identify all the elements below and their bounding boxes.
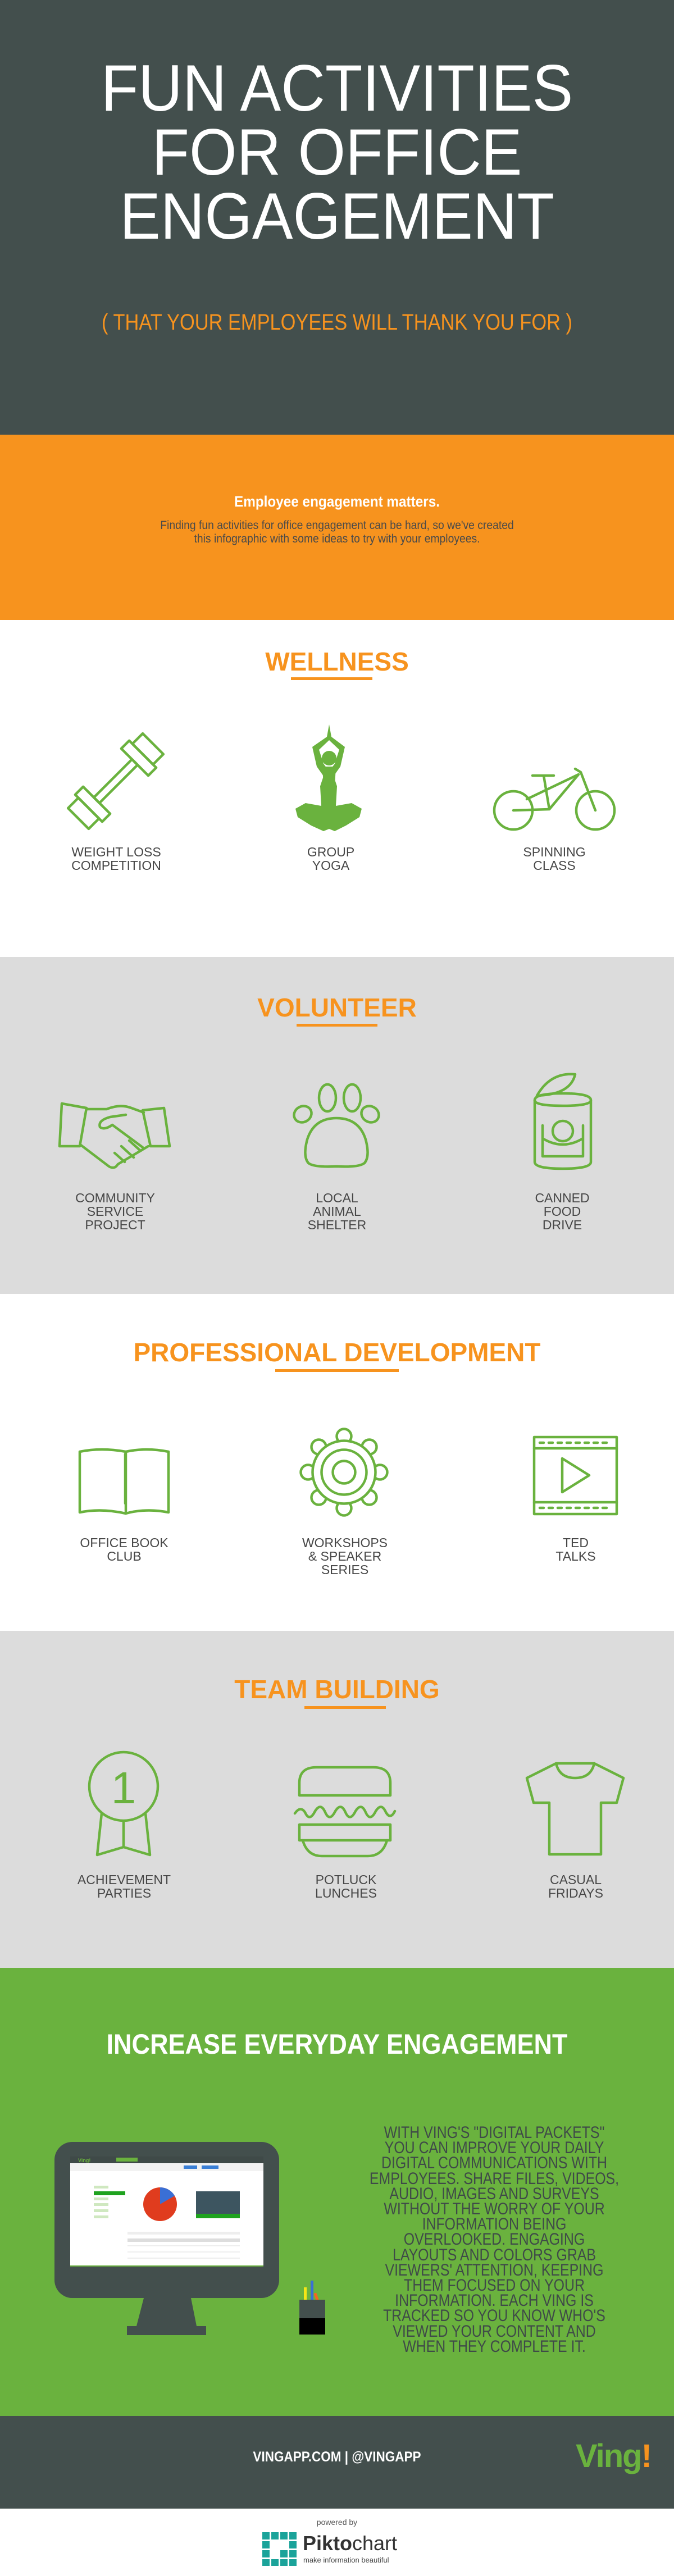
label: CLASS bbox=[533, 858, 576, 873]
label bbox=[315, 1872, 377, 1900]
label bbox=[78, 1872, 171, 1900]
icon: medal: 1 bbox=[111, 1763, 136, 1813]
label: WEIGHT LOSS bbox=[71, 845, 161, 859]
icon: canned food bbox=[534, 1073, 592, 1170]
label: COMMUNITY bbox=[75, 1191, 155, 1205]
label: & SPEAKER bbox=[308, 1549, 381, 1563]
intro heading: Employee engagement matters. bbox=[234, 493, 440, 510]
intro text bbox=[160, 519, 514, 545]
text block: THEM FOCUSED ON YOUR bbox=[404, 2276, 585, 2295]
heading: professional development: PROFESSIONAL DEVELOPMENT bbox=[133, 1338, 541, 1367]
label: SERIES bbox=[321, 1562, 368, 1577]
powered by text: powered by bbox=[317, 2518, 357, 2527]
powered by piktochart bbox=[0, 2509, 674, 2576]
subtitle: ( THAT YOUR EMPLOYEES WILL THANK YOU FOR ) bbox=[102, 310, 572, 335]
panel: increase everyday engagement bbox=[0, 1968, 674, 2416]
footer links: VINGAPP.COM | @VINGAPP bbox=[253, 2449, 421, 2465]
header panel bbox=[0, 0, 674, 435]
icon: bicycle bbox=[493, 767, 616, 831]
label: CANNED bbox=[535, 1191, 590, 1205]
label: TED bbox=[563, 1535, 589, 1550]
label bbox=[302, 1535, 388, 1577]
icon: dumbbell bbox=[66, 732, 165, 830]
text block: TRACKED SO YOU KNOW WHO'S bbox=[383, 2306, 605, 2325]
panel: team building bbox=[0, 1631, 674, 1968]
panel: volunteer bbox=[0, 957, 674, 1294]
text block: AUDIO, IMAGES AND SURVEYS bbox=[389, 2185, 599, 2203]
piktochart logo bbox=[262, 2532, 397, 2566]
heading: wellness: WELLNESS bbox=[265, 647, 409, 676]
label bbox=[71, 845, 161, 873]
heading: volunteer: VOLUNTEER bbox=[257, 993, 417, 1022]
text block bbox=[370, 2123, 619, 2356]
label: SERVICE bbox=[87, 1204, 143, 1219]
title bbox=[101, 51, 573, 253]
heading: INCREASE EVERYDAY ENGAGEMENT bbox=[106, 2028, 567, 2060]
piktochart logo: Piktochart bbox=[303, 2532, 397, 2555]
label: COMPETITION bbox=[71, 858, 161, 873]
label bbox=[548, 1872, 603, 1900]
text block: INFORMATION. EACH VING IS bbox=[395, 2291, 594, 2310]
icon: gear bbox=[299, 1428, 389, 1517]
label bbox=[523, 845, 586, 873]
icon: paw bbox=[293, 1083, 380, 1168]
label: DRIVE bbox=[543, 1218, 582, 1232]
label bbox=[555, 1535, 596, 1563]
text block: VIEWERS' ATTENTION, KEEPING bbox=[385, 2261, 603, 2279]
text block: WITH VING'S "DIGITAL PACKETS" bbox=[384, 2123, 604, 2142]
icon: handshake bbox=[58, 1102, 171, 1169]
piktochart logo: make information beautiful bbox=[303, 2556, 389, 2564]
icon: medal bbox=[88, 1751, 160, 1857]
label: ANIMAL bbox=[313, 1204, 361, 1219]
label: LUNCHES bbox=[315, 1886, 377, 1900]
text block: YOU CAN IMPROVE YOUR DAILY bbox=[385, 2139, 604, 2157]
label: ACHIEVEMENT bbox=[78, 1872, 171, 1887]
panel: professional development bbox=[0, 1294, 674, 1631]
label: YOGA bbox=[312, 858, 349, 873]
text block: OVERLOOKED. ENGAGING bbox=[404, 2230, 585, 2249]
label bbox=[307, 845, 354, 873]
label: LOCAL bbox=[316, 1191, 358, 1205]
label: FRIDAYS bbox=[548, 1886, 603, 1900]
heading: team building: TEAM BUILDING bbox=[234, 1675, 440, 1704]
label: PROJECT bbox=[85, 1218, 145, 1232]
icon: video bbox=[532, 1435, 618, 1515]
label: OFFICE BOOK bbox=[80, 1535, 168, 1550]
label: WORKSHOPS bbox=[302, 1535, 388, 1550]
label bbox=[75, 1191, 155, 1232]
icon: pencil cup bbox=[299, 2281, 325, 2335]
icon: book bbox=[79, 1448, 170, 1515]
text block: DIGITAL COMMUNICATIONS WITH bbox=[381, 2154, 607, 2172]
text block: EMPLOYEES. SHARE FILES, VIDEOS, bbox=[370, 2169, 619, 2188]
label bbox=[308, 1191, 366, 1232]
intro text: Finding fun activities for office engagement can be hard, so we've created bbox=[160, 519, 514, 532]
intro panel bbox=[0, 435, 674, 620]
text block: WHEN THEY COMPLETE IT. bbox=[403, 2337, 586, 2356]
text block: VIEWED YOUR CONTENT AND bbox=[393, 2322, 596, 2341]
label bbox=[80, 1535, 168, 1563]
title: FUN ACTIVITIES bbox=[101, 51, 573, 125]
icon: t-shirt bbox=[526, 1762, 625, 1855]
label: FOOD bbox=[544, 1204, 581, 1219]
icon: yoga bbox=[295, 724, 362, 831]
label: TALKS bbox=[555, 1549, 596, 1563]
monitor illustration: Ving! bbox=[78, 2158, 90, 2163]
footer bbox=[0, 2416, 674, 2509]
label: SPINNING bbox=[523, 845, 586, 859]
panel: wellness bbox=[0, 620, 674, 957]
monitor illustration bbox=[54, 2142, 279, 2335]
label: CASUAL bbox=[550, 1872, 602, 1887]
text block: LAYOUTS AND COLORS GRAB bbox=[393, 2246, 596, 2264]
icon: burger bbox=[293, 1766, 397, 1858]
label: PARTIES bbox=[97, 1886, 151, 1900]
intro text: this infographic with some ideas to try with your employees. bbox=[194, 532, 480, 545]
label bbox=[535, 1191, 590, 1232]
text block: WITHOUT THE WORRY OF YOUR bbox=[384, 2200, 605, 2218]
label: POTLUCK bbox=[316, 1872, 376, 1887]
text block: INFORMATION BEING bbox=[422, 2215, 566, 2233]
label: CLUB bbox=[107, 1549, 142, 1563]
logo: ving: Ving! bbox=[576, 2438, 651, 2474]
label: GROUP bbox=[307, 845, 354, 859]
label: SHELTER bbox=[308, 1218, 366, 1232]
title: ENGAGEMENT bbox=[120, 179, 554, 253]
title: FOR OFFICE bbox=[152, 115, 522, 189]
